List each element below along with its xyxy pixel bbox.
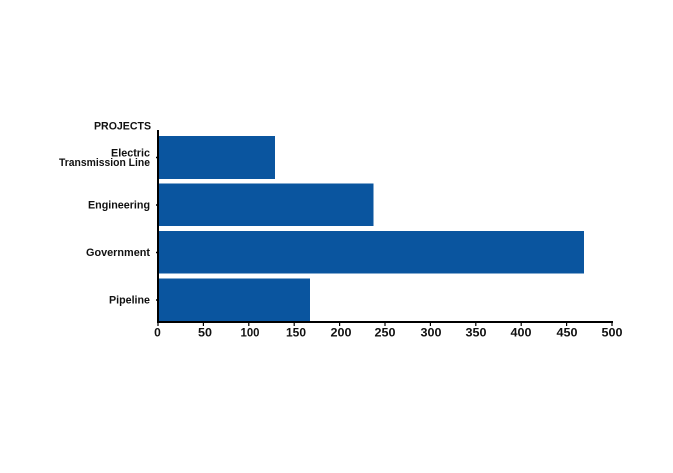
x axis tick labels [154,326,623,340]
category labels: Transmission Line [59,157,150,169]
category labels: Engineering [88,200,150,212]
x axis tick labels: 100 [240,326,260,340]
x axis tick labels: 0 [154,326,161,340]
y axis [156,130,158,323]
x axis tick labels: 450 [556,326,578,340]
category labels: Pipeline [109,294,150,306]
bar: Electric Transmission Line [159,136,275,179]
x axis tick labels: 400 [510,326,532,340]
category labels: Electric [111,148,150,160]
x axis [157,322,613,326]
x axis tick labels: 200 [330,326,352,340]
x axis tick labels: 150 [286,326,306,340]
x axis tick labels: 500 [602,326,623,340]
bar: Pipeline [159,278,310,321]
x axis tick labels: 50 [198,326,212,340]
x axis tick labels: 350 [466,326,487,340]
bar: Engineering [159,184,374,226]
x axis tick labels: 300 [420,326,442,340]
y axis title: PROJECTS [94,120,151,132]
category labels [59,148,150,306]
category labels: Government [86,247,150,259]
bar: Government [159,231,584,274]
x axis tick labels: 250 [374,326,396,340]
